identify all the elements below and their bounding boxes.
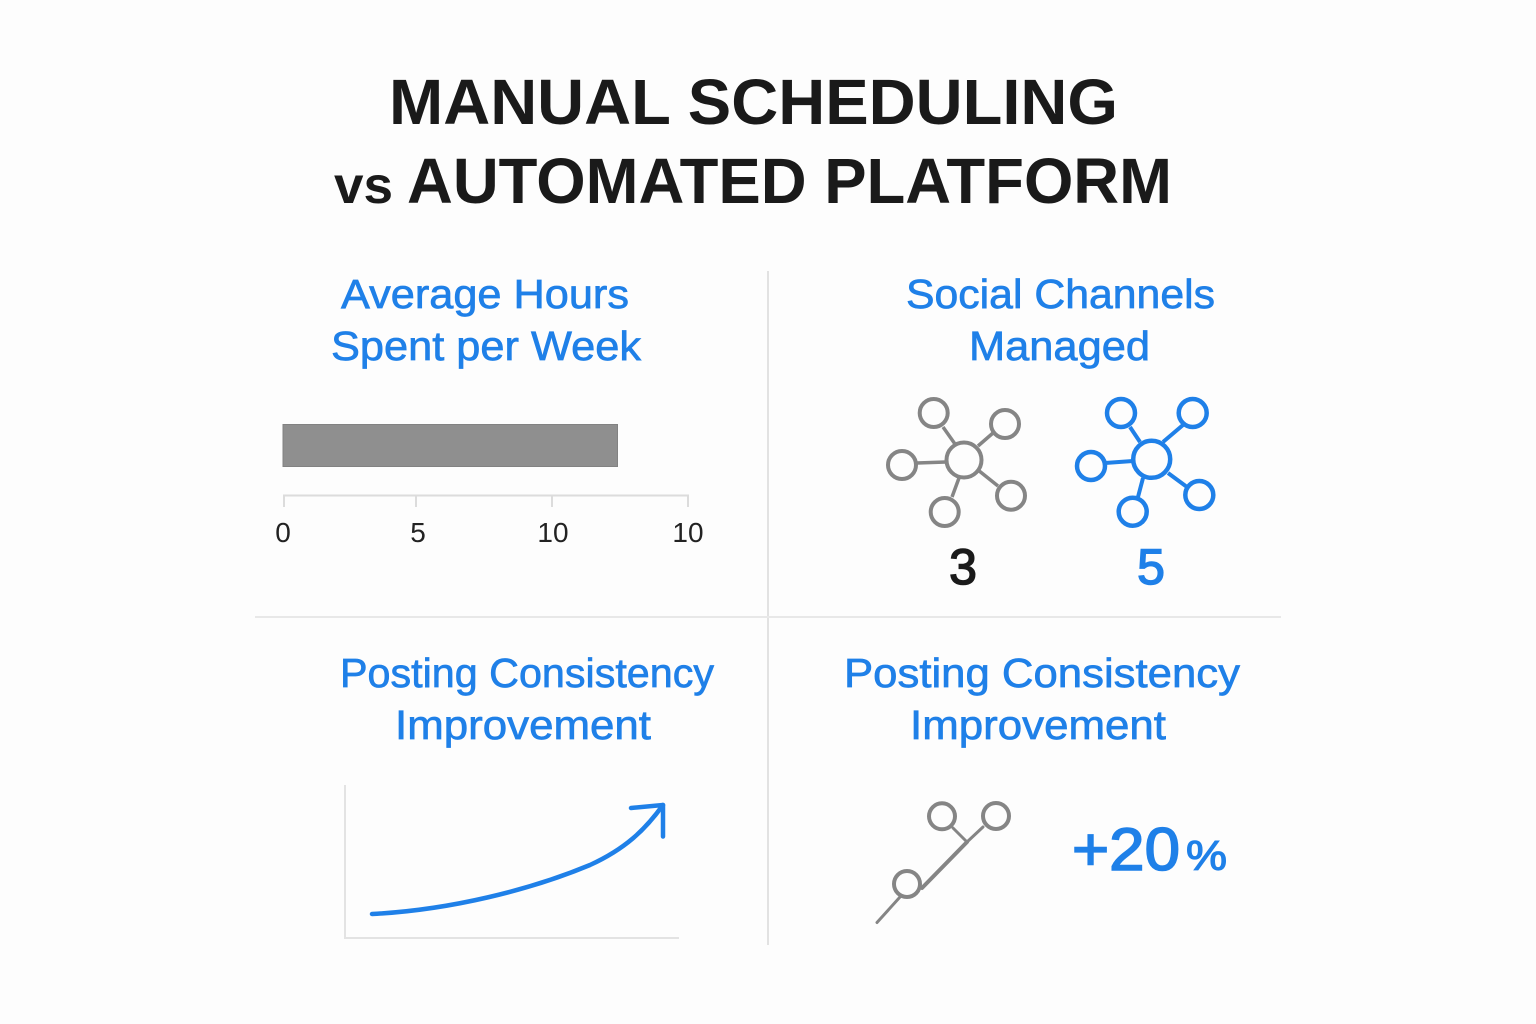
panel: posting consistency value bbox=[844, 650, 1241, 922]
panel: average hours bbox=[275, 271, 704, 548]
icon: blue network bbox=[1077, 399, 1213, 526]
arrow: growth curve bbox=[372, 805, 663, 914]
panel: social channels bbox=[888, 271, 1215, 595]
value: plus twenty percent bbox=[1072, 816, 1227, 883]
heading: posting consistency left: Improvement bbox=[395, 702, 652, 748]
heading: social channels: Social Channels bbox=[906, 271, 1215, 317]
title: AUTOMATED PLATFORM bbox=[407, 145, 1172, 217]
bar chart: 0 bbox=[275, 517, 291, 548]
heading: average hours: Spent per Week bbox=[331, 323, 642, 369]
bar chart: 5 bbox=[410, 517, 426, 548]
heading: average hours bbox=[331, 271, 642, 369]
title: MANUAL SCHEDULING bbox=[389, 66, 1118, 138]
icon: grey network bbox=[888, 399, 1025, 526]
value: automated channels: 5 bbox=[1137, 539, 1165, 595]
heading: posting consistency right: Posting Consistency bbox=[844, 650, 1241, 696]
line chart axes bbox=[345, 785, 679, 938]
value: plus twenty percent: +20 bbox=[1072, 816, 1180, 883]
value: plus twenty percent: % bbox=[1186, 832, 1227, 879]
value: manual channels: 3 bbox=[949, 539, 977, 595]
panel: posting consistency chart bbox=[340, 650, 714, 938]
icon: grey branch bbox=[877, 803, 1009, 922]
bar chart: 10 bbox=[672, 517, 704, 548]
heading: posting consistency left bbox=[340, 650, 714, 748]
heading: posting consistency left: Posting Consistency bbox=[340, 650, 714, 696]
bar chart: 10 bbox=[537, 517, 569, 548]
heading: social channels bbox=[906, 271, 1215, 369]
heading: posting consistency right: Improvement bbox=[910, 702, 1167, 748]
heading: social channels: Managed bbox=[969, 323, 1150, 369]
bar chart bbox=[275, 424, 704, 548]
heading: average hours: Average Hours bbox=[341, 271, 629, 317]
title bbox=[334, 66, 1172, 217]
heading: posting consistency right bbox=[844, 650, 1241, 748]
title: vs bbox=[334, 157, 393, 215]
